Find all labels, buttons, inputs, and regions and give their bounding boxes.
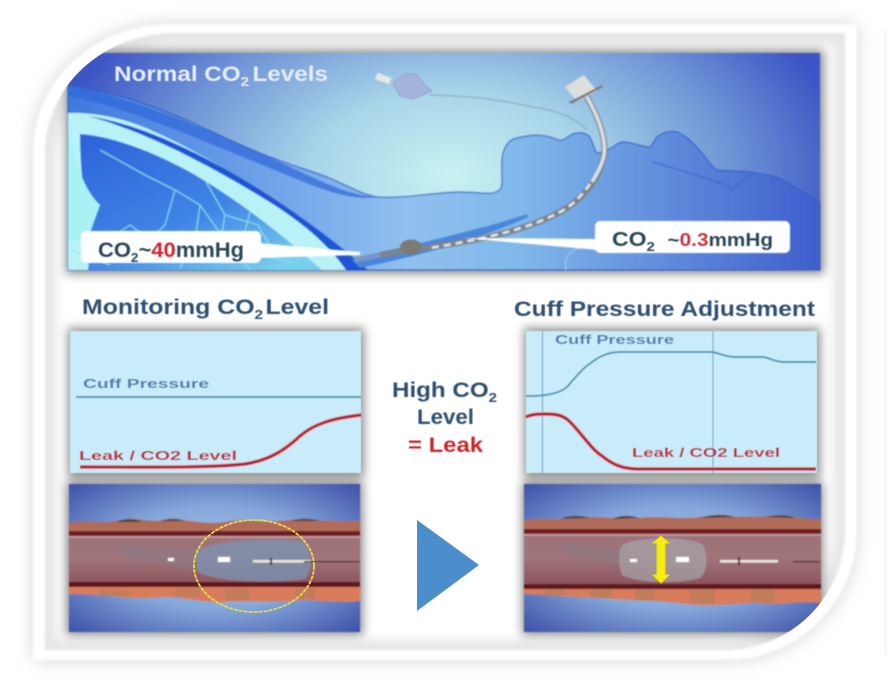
label: leak level: Leak / CO2 Level: [632, 445, 780, 460]
frame interior: [56, 44, 834, 640]
trachea outline: [352, 214, 528, 268]
upper tissue shadows: [115, 519, 320, 522]
inflated cuff: [619, 538, 706, 582]
callout: lung CO2: CO: [98, 239, 130, 262]
chart: monitoring CO2 level: [70, 331, 361, 473]
time markers: [542, 331, 713, 473]
tube highlights: [630, 559, 637, 562]
lumen: [524, 529, 821, 587]
chart: cuff pressure adjustment: [526, 331, 817, 473]
text: High CO2 Level = Leak: [392, 379, 497, 457]
lung outline: [68, 113, 347, 270]
panel: normal CO2 levels anatomy scene: [68, 53, 820, 270]
scene background: [68, 52, 821, 202]
line: cuff pressure: [526, 352, 816, 396]
airway band: [88, 116, 368, 270]
image: trachea with sealed cuff: [524, 484, 821, 632]
panel shadows: [66, 50, 824, 635]
line: leak level: [80, 415, 361, 467]
label: leak level: Leak / CO2 Level: [79, 448, 237, 463]
tube shadow: [560, 542, 625, 566]
text: High CO2 Level = Leak: Level: [417, 406, 474, 429]
lung left glow: [68, 128, 100, 242]
upper tissue: [68, 518, 361, 532]
lower tissue bands: [545, 589, 775, 603]
callout: tracheal CO2: ~: [668, 230, 680, 250]
text: Normal CO2 Levels: 2: [241, 74, 249, 89]
neck detail: [565, 247, 582, 270]
image: trachea with leaking cuff: [69, 484, 360, 632]
callout: tracheal CO2: 2: [647, 239, 655, 254]
callout: lung CO2: 2: [131, 250, 138, 265]
line: cuff pressure: [76, 396, 361, 398]
tube shadow: [115, 545, 200, 572]
endotracheal tube: [355, 75, 604, 260]
bronchi: [70, 150, 290, 270]
tube highlights: [168, 558, 174, 561]
heading: Monitoring CO2 Level: Monitoring CO: [82, 296, 228, 319]
line: leak level: [526, 414, 816, 469]
callout: lung CO2: 40mmHg: [151, 239, 241, 262]
double arrow: cuff expansion: [653, 536, 669, 583]
text: High CO2 Level = Leak: High CO: [392, 379, 476, 402]
chest band: [68, 85, 377, 198]
heading: Monitoring CO2 Level: Level: [265, 296, 329, 319]
lumen: [69, 531, 360, 587]
deflated cuff: [196, 539, 310, 582]
line: leak level halo: [526, 414, 816, 469]
label: cuff pressure: Cuff Pressure: [83, 376, 209, 391]
text: High CO2 Level = Leak: = Leak: [408, 434, 483, 457]
callout: lung CO2: [81, 231, 360, 265]
heading: Cuff Pressure Adjustment: Cuff Pressure Adjustment: [514, 298, 815, 321]
text: High CO2 Level = Leak: 2: [489, 390, 497, 405]
upper tissue shadows: [560, 515, 795, 519]
lower tissue: [524, 585, 821, 605]
patient body silhouette: [68, 85, 820, 270]
faint right edge line: [884, 30, 887, 655]
label: cuff pressure: Cuff Pressure: [555, 332, 674, 347]
callout: tracheal CO2: CO: [612, 229, 642, 251]
lower tissue: [69, 585, 360, 602]
pilot balloon and line: [375, 73, 587, 130]
text: Normal CO2 Levels: Levels: [252, 63, 328, 86]
heading: Monitoring CO2 Level: 2: [255, 307, 263, 322]
arrow: right triangle: [417, 520, 479, 611]
text: Normal CO2 Levels: Normal CO: [114, 63, 224, 86]
callout: tracheal CO2: 0.3mmHg: [680, 230, 765, 250]
upper tissue: [524, 516, 821, 533]
chin line: [653, 162, 757, 190]
callout: tracheal CO2: [463, 221, 790, 254]
tube connector: [565, 75, 597, 101]
lung body: [80, 134, 322, 270]
line: leak level halo: [80, 415, 361, 467]
highlight circle: [194, 520, 314, 612]
callout: lung CO2: ~: [138, 239, 151, 262]
lower tissue bands: [100, 589, 315, 600]
